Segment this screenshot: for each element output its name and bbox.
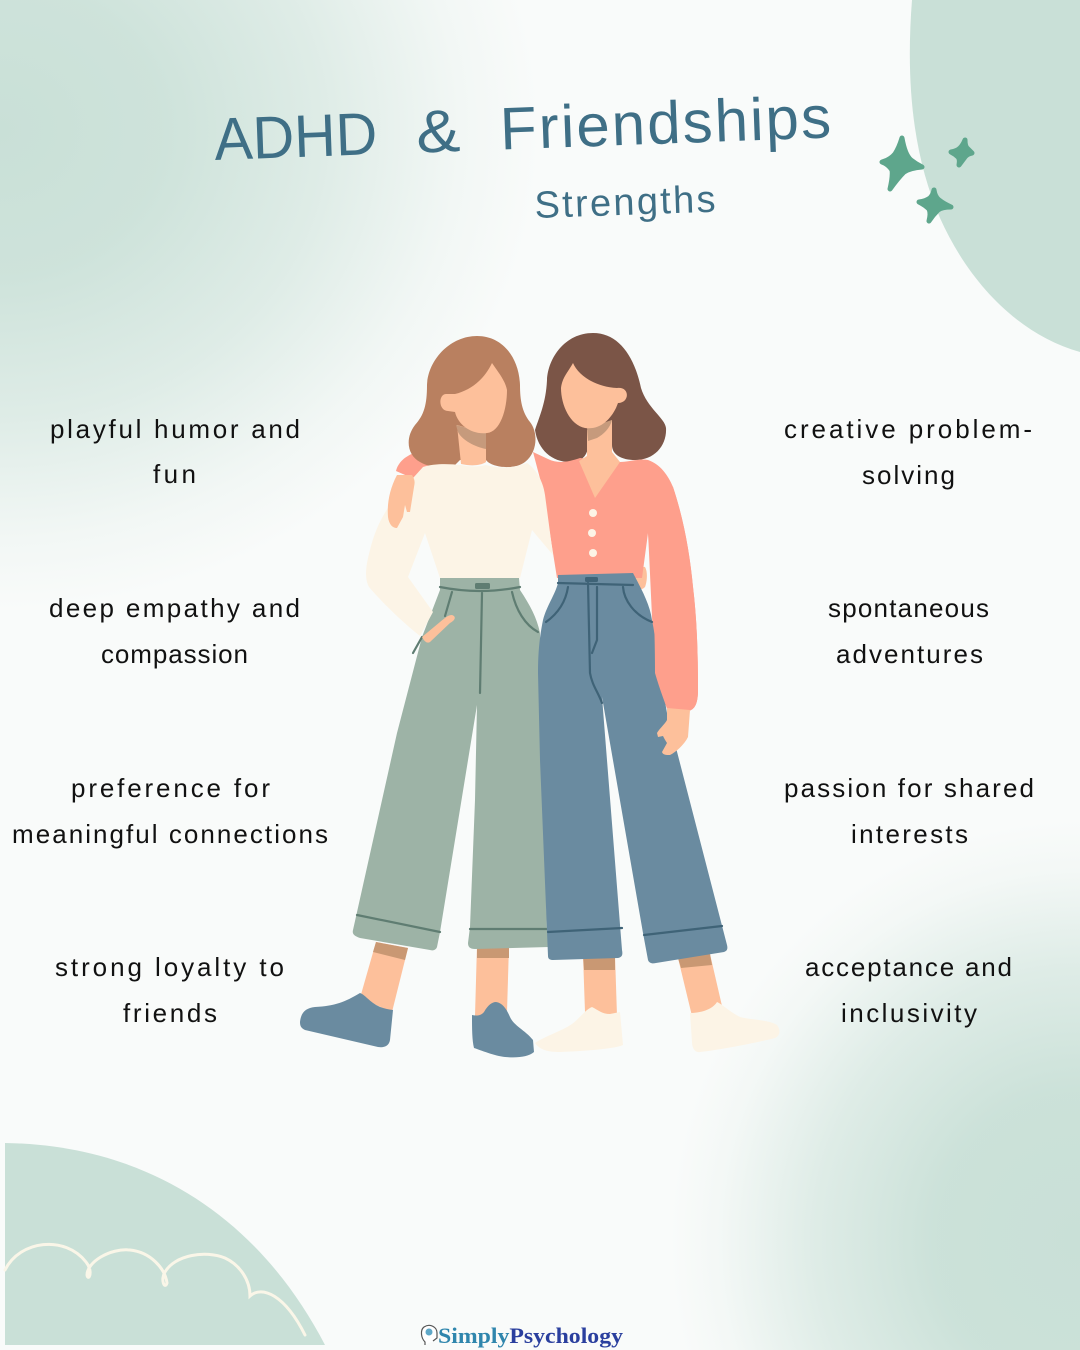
strength: acceptance: inclusivity xyxy=(841,998,977,1028)
strength: acceptance: acceptance and xyxy=(805,952,1012,982)
blue jeans xyxy=(538,573,727,963)
strength: meaningful connections: meaningful connections xyxy=(12,819,328,849)
subtitle: Strengths xyxy=(534,179,716,227)
sage trousers xyxy=(353,577,549,950)
left woman's neck shadow xyxy=(456,425,486,449)
top-right decorative blob xyxy=(910,0,1080,352)
right woman's lower hand xyxy=(657,708,690,755)
left woman's neck xyxy=(457,425,486,465)
jeans details xyxy=(546,583,722,935)
right strengths list xyxy=(784,414,1034,1028)
title: & xyxy=(415,97,461,166)
ankles xyxy=(360,942,722,1016)
blouse buttons xyxy=(588,509,597,557)
hand on shoulder xyxy=(388,475,415,528)
left woman's hair xyxy=(409,336,535,467)
title: Friendships xyxy=(499,83,832,163)
right woman's hair back xyxy=(535,333,666,462)
logo: SimplyPsychology xyxy=(421,1323,623,1348)
salmon sleeve over trousers xyxy=(648,487,698,711)
title xyxy=(213,83,832,173)
logo wordmark: SimplyPsychology xyxy=(438,1323,623,1348)
hand in pocket xyxy=(422,615,455,643)
cream sweater xyxy=(366,463,553,636)
salmon blouse and sleeve xyxy=(533,452,698,711)
strength: playful humor: fun xyxy=(153,459,196,489)
icon: sparkles xyxy=(882,138,972,221)
sleeve behind: arm around shoulder xyxy=(396,452,440,478)
title: ADHD xyxy=(213,100,378,173)
left strengths list xyxy=(12,414,328,1028)
left woman's face xyxy=(440,363,507,433)
strength: shared interests: passion for shared xyxy=(784,773,1034,803)
strength: loyalty: strong loyalty to xyxy=(55,952,284,982)
strength: deep empathy: compassion xyxy=(101,639,248,669)
jeans belt loop xyxy=(585,577,598,582)
strength: problem solving: creative problem- xyxy=(784,414,1032,444)
shoes xyxy=(300,993,779,1057)
illustration: two friends xyxy=(300,333,779,1057)
strength: spontaneous adventures: adventures xyxy=(836,639,983,669)
right woman's neck and neckline xyxy=(579,420,620,498)
strength: shared interests: interests xyxy=(851,819,968,849)
strength: deep empathy: deep empathy and xyxy=(49,593,300,623)
right woman's neck shadow xyxy=(587,420,612,441)
sage belt loop xyxy=(475,583,490,589)
bottom-left decorative blob xyxy=(5,1143,325,1345)
sage trouser details xyxy=(357,587,547,932)
strength: loyalty: friends xyxy=(123,998,217,1028)
strength: problem solving: solving xyxy=(862,460,955,490)
icon: head with bulb xyxy=(421,1325,437,1345)
right woman's hand on hip xyxy=(633,567,647,589)
right woman's face xyxy=(561,363,627,428)
strength: meaningful connections: preference for xyxy=(71,773,270,803)
strength: playful humor: playful humor and xyxy=(50,414,300,444)
cloud line doodle xyxy=(5,1244,305,1335)
strength: spontaneous adventures: spontaneous xyxy=(828,593,989,623)
